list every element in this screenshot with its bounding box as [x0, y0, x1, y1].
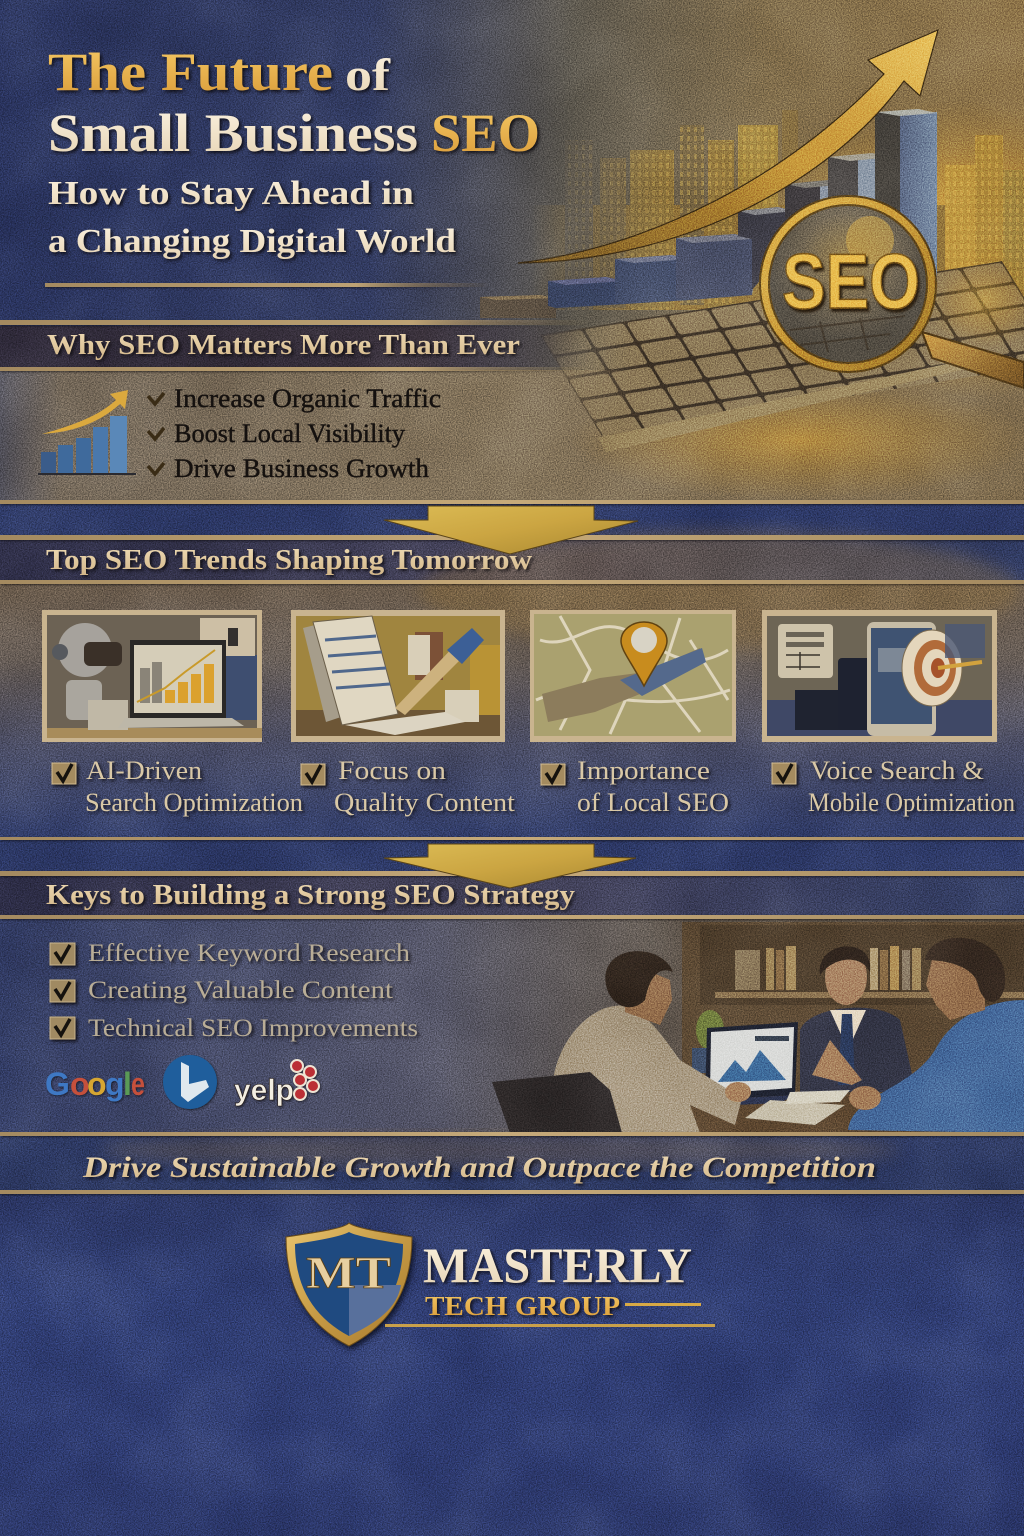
benefit list: Increase Organic Traffic: [174, 384, 441, 413]
plant: [696, 1010, 724, 1050]
heading: top SEO trends: Top SEO Trends Shaping Tomorrow: [46, 544, 532, 576]
title: [48, 42, 540, 163]
target: [902, 630, 982, 706]
keyboard: [540, 261, 1024, 452]
strategy checklist: Technical SEO Improvements: [88, 1015, 418, 1042]
title: Small Business: [48, 103, 418, 163]
label: local SEO: [541, 756, 729, 817]
label: quality content: Focus on: [338, 756, 446, 785]
rising gold arrow: [518, 30, 938, 263]
bookshelf: [700, 925, 1024, 1005]
card: AI-driven search: [42, 610, 262, 742]
band backgrounds for strategy section: [0, 838, 1024, 1193]
chair: [492, 1072, 622, 1133]
label: AI-driven: [52, 756, 303, 817]
laptop chart: [118, 640, 244, 728]
icon: mini growth bar chart: [38, 390, 136, 475]
label: voice and mobile: Mobile Optimization: [808, 788, 1015, 817]
map pin: [621, 622, 667, 686]
logo: Google: g: [105, 1066, 125, 1102]
logo: Google: o: [87, 1066, 107, 1102]
pen: [395, 640, 472, 715]
logo: Google: [45, 1066, 145, 1102]
benefit list: Boost Local Visibility: [174, 419, 405, 448]
laptop: [705, 1022, 798, 1105]
shield: [286, 1223, 412, 1346]
benefit list: [148, 384, 441, 483]
document stack: [303, 616, 398, 725]
logo: Masterly Tech Group: TECH GROUP: [425, 1291, 620, 1321]
label: quality content: [301, 756, 516, 817]
smartphone: [867, 622, 936, 736]
heading: strategy keys: Keys to Building a Strong SEO Strategy: [46, 879, 576, 911]
logo: Google: e: [131, 1066, 145, 1102]
label: voice and mobile: [772, 756, 1015, 817]
subtitle: [48, 175, 456, 260]
logo: Yelp: [234, 1060, 319, 1107]
center man: [800, 946, 916, 1092]
label: AI-driven: Search Optimization: [85, 788, 303, 817]
band backgrounds for trends section: [0, 500, 1024, 838]
label: quality content: Quality Content: [334, 788, 516, 817]
strategy checklist: [50, 940, 418, 1042]
meeting photo illustration: [492, 919, 1024, 1132]
logo: Yelp: yelp: [234, 1074, 294, 1107]
label: local SEO: of Local SEO: [577, 788, 729, 817]
card: voice and mobile: [762, 610, 997, 742]
label: local SEO: Importance: [577, 756, 710, 785]
logo: Google: o: [70, 1066, 90, 1102]
right man: [848, 938, 1024, 1133]
strategy checklist: Effective Keyword Research: [88, 940, 411, 967]
section band: why SEO matters: [0, 326, 590, 367]
trend labels: [52, 756, 1015, 817]
magnifier lens: SEO: [782, 237, 920, 325]
magnifier handle: [922, 332, 1024, 388]
arrow: down to trends: [384, 506, 638, 554]
card: local SEO map: [530, 610, 736, 742]
logo: Bing: [163, 1055, 217, 1109]
hero illustration: skyline, bar steps, keyboard and SEO magnifier: [480, 30, 1024, 500]
robot: [52, 623, 128, 730]
logo: Google: l: [123, 1066, 132, 1102]
closing tagline: Drive Sustainable Growth and Outpace the Competition: [82, 1151, 876, 1184]
logo: Google: G: [45, 1066, 70, 1102]
label: AI-driven: AI-Driven: [86, 756, 202, 785]
heading: why SEO matters: Why SEO Matters More Than Ever: [47, 329, 520, 361]
logo: Masterly Tech Group: [286, 1223, 715, 1346]
magnifier lens: [760, 196, 936, 372]
strategy checklist: Creating Valuable Content: [88, 977, 393, 1004]
table: [640, 1094, 1024, 1133]
label: voice and mobile: Voice Search &: [810, 756, 984, 785]
bar steps: [480, 109, 937, 318]
arrow: down to strategy: [384, 844, 636, 888]
wordmark: MASTERLY: [423, 1237, 692, 1293]
gold divider lines: [0, 283, 1024, 1194]
subtitle: How to Stay Ahead in: [48, 175, 414, 212]
title: The Future: [48, 42, 333, 102]
benefit list: Drive Business Growth: [174, 454, 429, 483]
title: of: [345, 49, 391, 100]
shield: MT: [306, 1248, 391, 1298]
title: SEO: [431, 103, 540, 163]
left man: [552, 951, 751, 1133]
card: quality content: [291, 610, 505, 742]
subtitle: a Changing Digital World: [48, 223, 456, 260]
skyline: [520, 110, 1024, 310]
